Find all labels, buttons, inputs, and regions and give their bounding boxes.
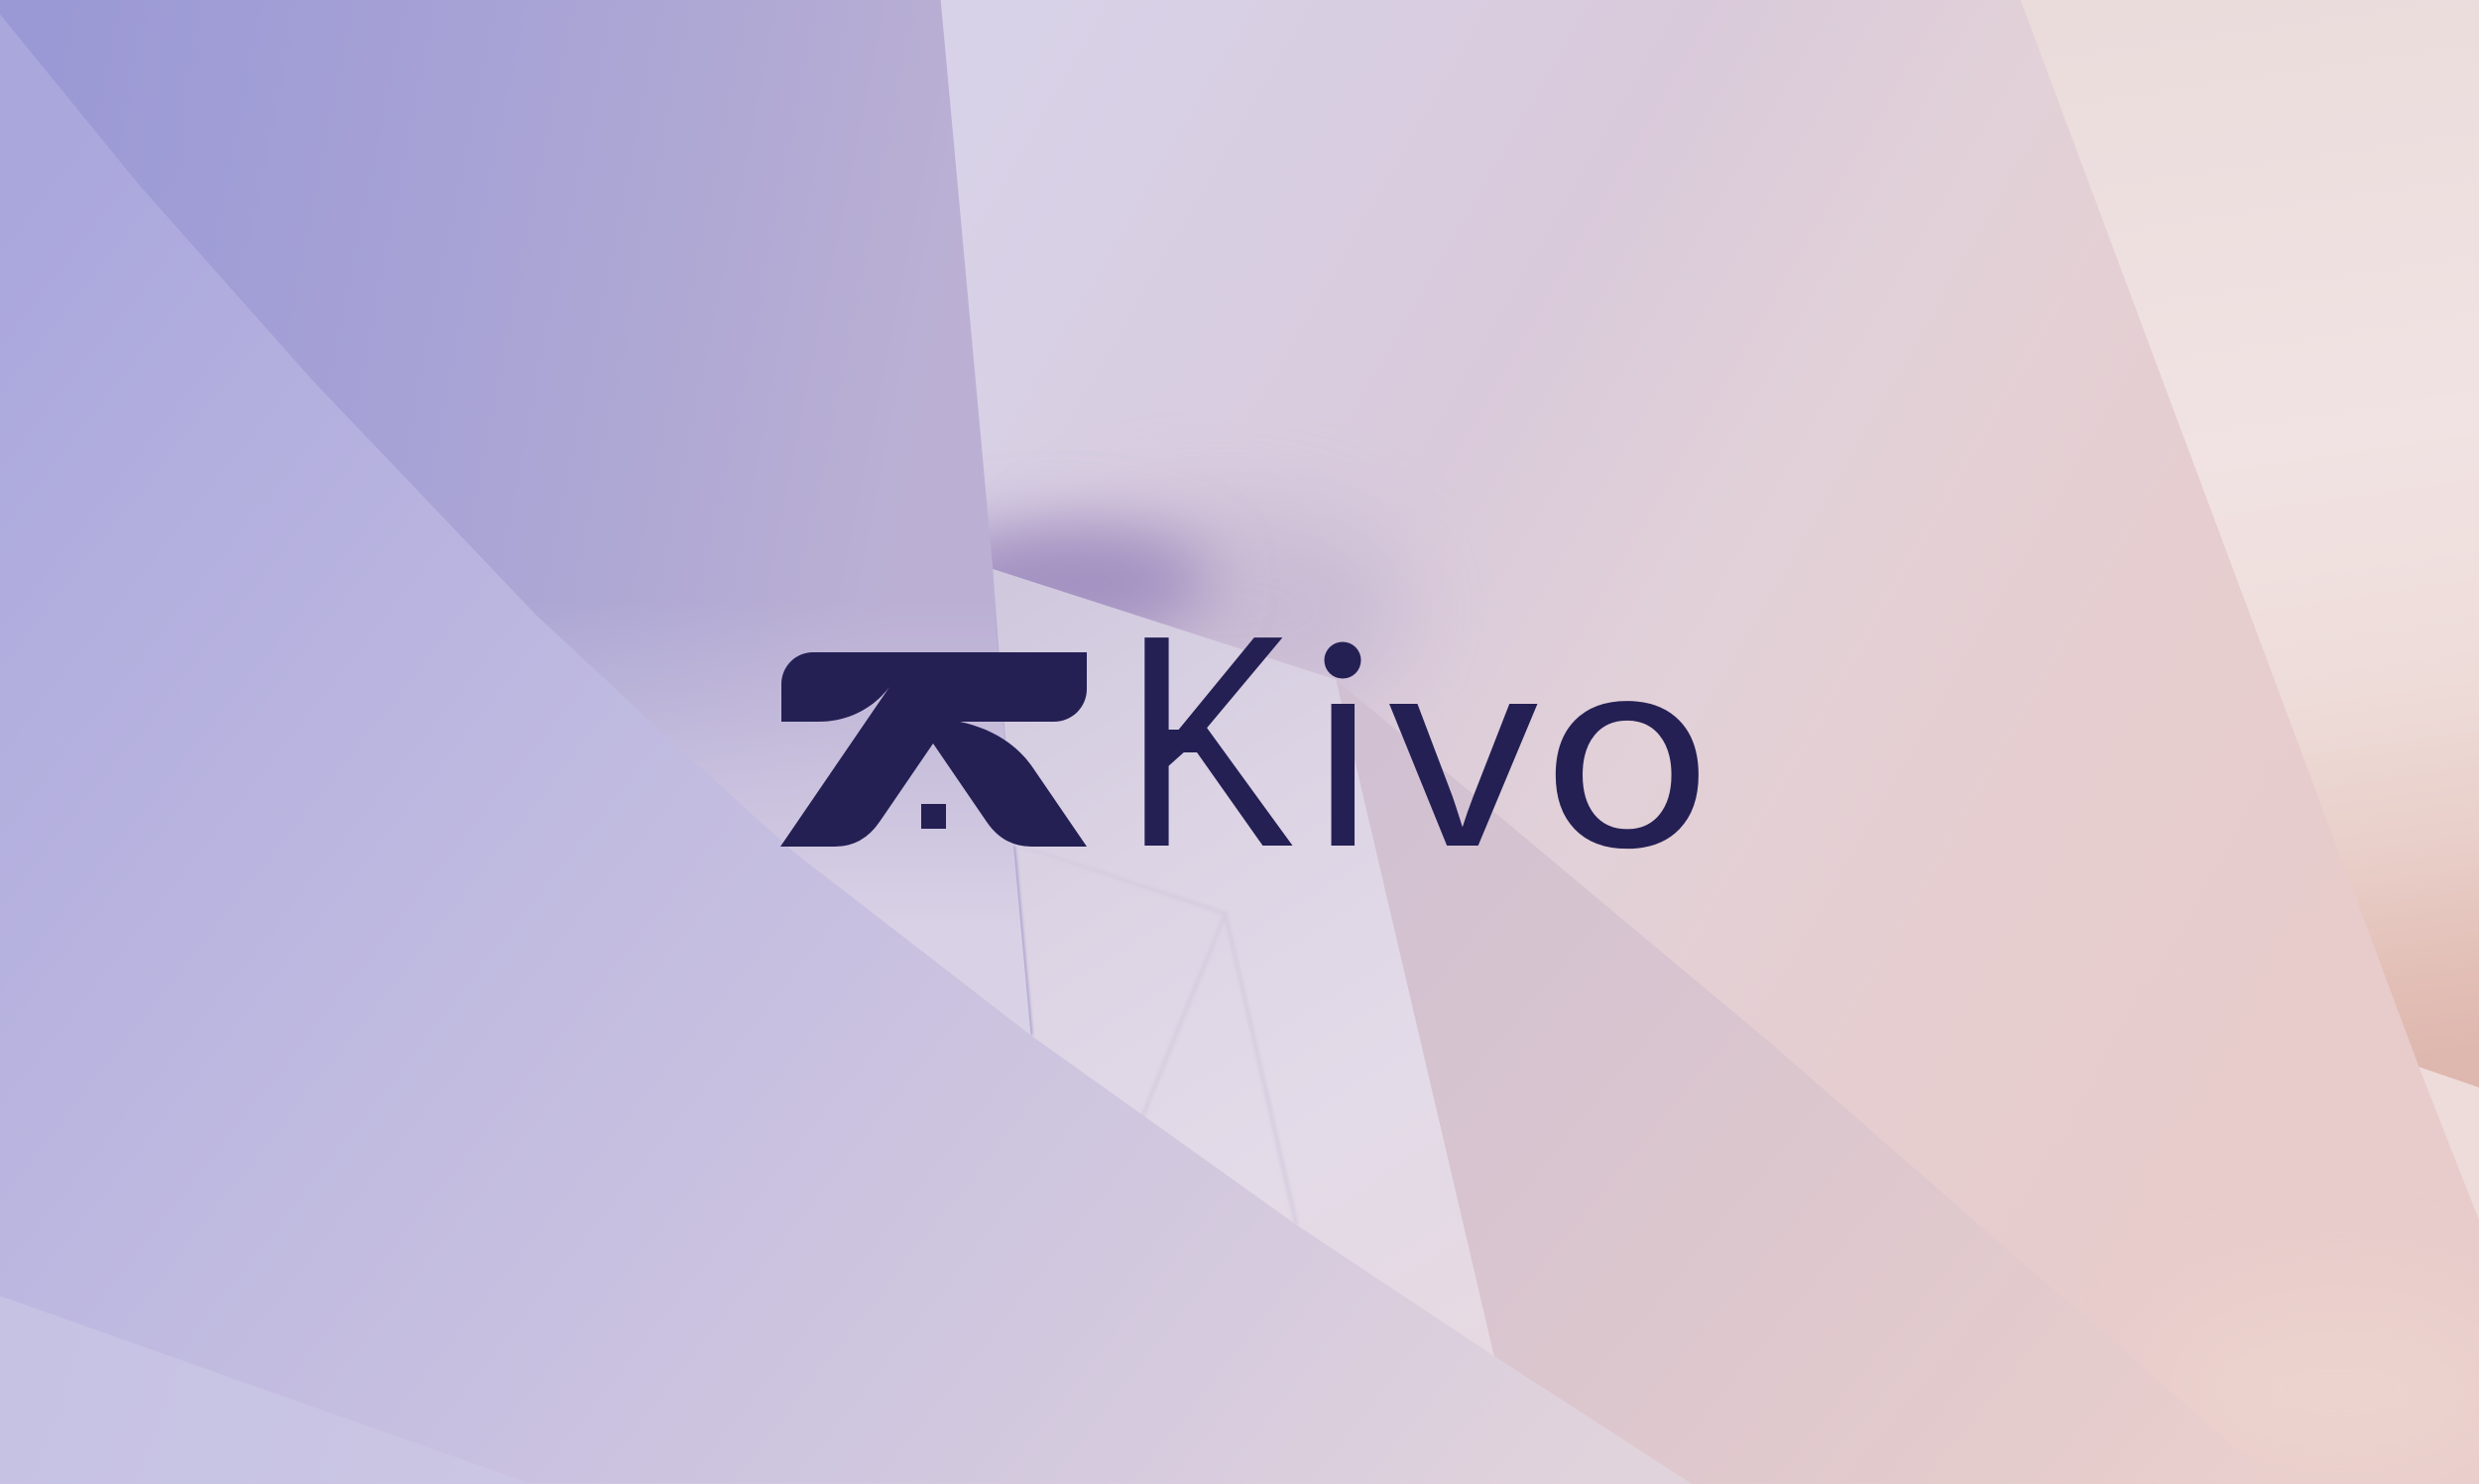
wordmark: Kivo: K	[1123, 574, 1295, 912]
wordmark: Kivo: v	[1388, 604, 1538, 905]
logo lockup	[780, 637, 1699, 849]
panel: far right light facet with peach falloff	[2021, 0, 2479, 1087]
panel: lower wall fading into central facet	[597, 669, 1031, 1035]
icon: Kivo mark	[780, 652, 1087, 847]
panel: broad shadow under top wall	[1154, 502, 1398, 684]
panel: warm glow bottom right	[2166, 1296, 2479, 1484]
panel: big foreground wedge	[0, 14, 1692, 1484]
wordmark: Kivo: i	[1314, 604, 1372, 905]
panel: bottom left corner facet	[0, 1297, 232, 1483]
panel: top middle and pink wall	[1349, 0, 2479, 1484]
panel: thin fold lines in central facet	[1013, 846, 1296, 1225]
wordmark: Kivo	[1144, 637, 1699, 849]
panel: top left wall	[0, 0, 1013, 857]
panel: central light facet	[993, 569, 1493, 1356]
panel: dark shadow under top wall	[909, 524, 1210, 638]
panel: lower far right sliver	[2419, 1067, 2479, 1220]
wordmark: Kivo: o	[1540, 606, 1714, 907]
panel: mauve lower facet	[1355, 707, 1900, 1439]
